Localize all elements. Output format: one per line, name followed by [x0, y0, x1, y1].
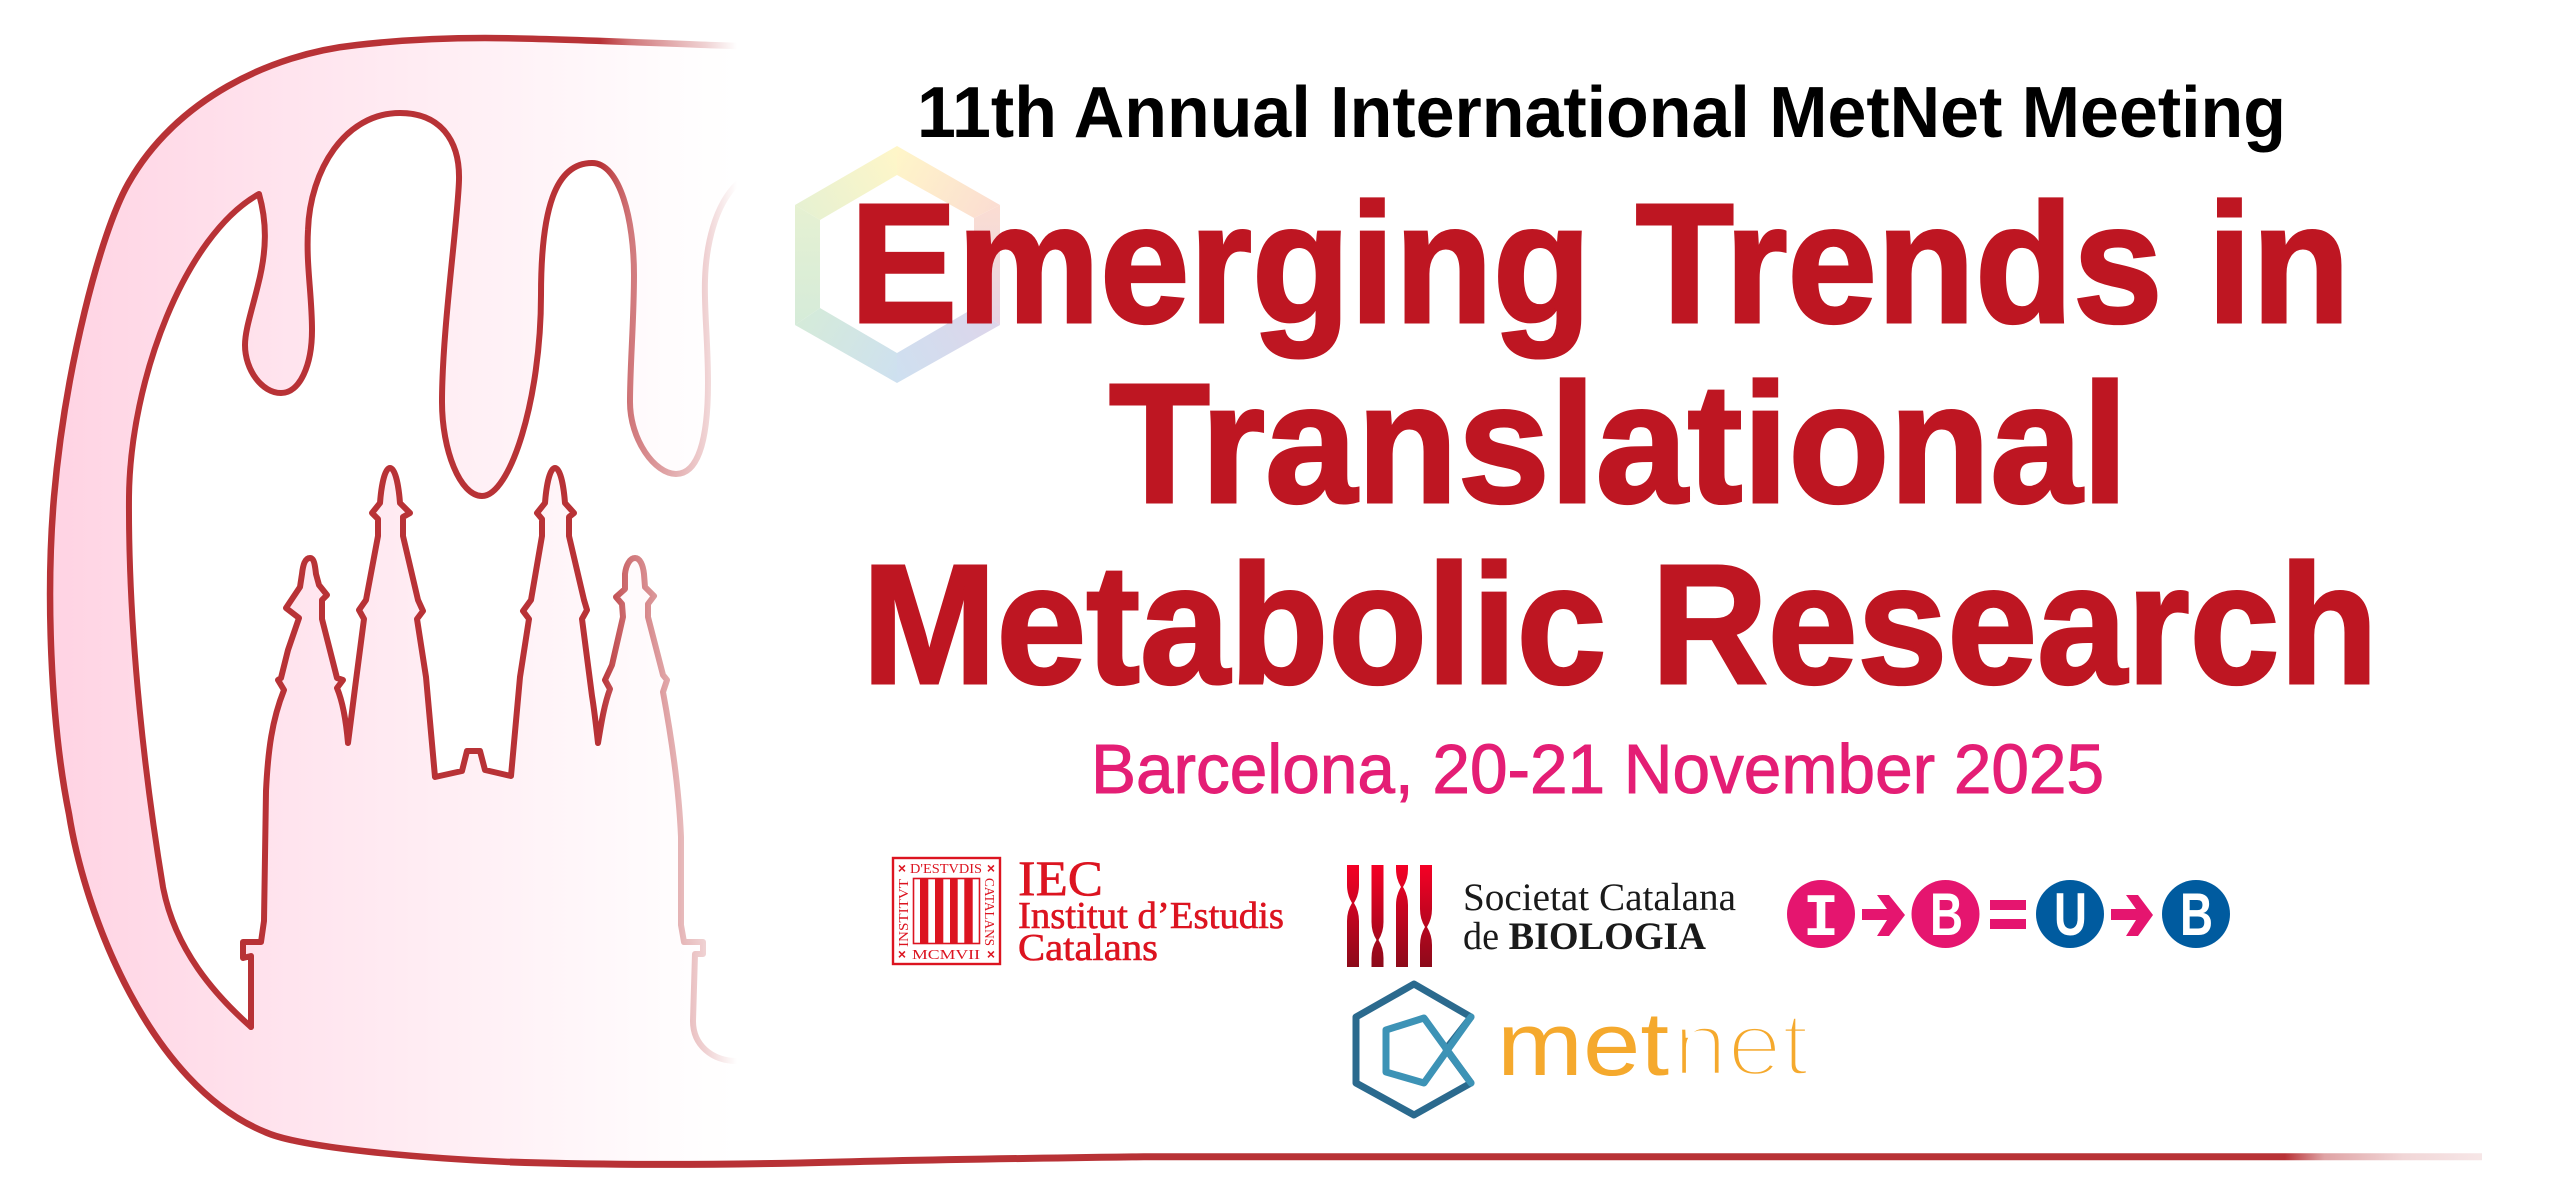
cathedral silhouette outline [243, 468, 737, 1061]
IBUB letters: B [1930, 881, 1963, 948]
main title: Metabolic Research [862, 530, 2378, 720]
IBUB letters: U [2054, 881, 2087, 948]
logo: MetNet [1356, 984, 1809, 1115]
IEC seal: MCMVII [912, 948, 980, 963]
MetNet wordmark: met [1497, 995, 1669, 1095]
IBUB letters: I [1803, 886, 1839, 954]
logo: Societat Catalana de Biologia [1347, 865, 1736, 967]
icon: pastel hexagon behind title [795, 146, 1000, 383]
MetNet wordmark [1497, 995, 1809, 1095]
IEC seal: D'ESTVDIS [910, 862, 982, 877]
IBUB discs [1787, 880, 2230, 948]
IEC wordmark: Institut d’Estudis [1018, 895, 1284, 937]
baseline rule fading to the right [510, 1157, 2482, 1164]
IBUB arrows and equals [1862, 895, 2153, 936]
main title: Translational [1109, 349, 2128, 539]
logo: IBUB [1787, 880, 2230, 954]
logo: Institut d'Estudis Catalans [893, 850, 1284, 969]
SCB striped mark [1347, 865, 1432, 967]
location and date: Barcelona, 20-21 November 2025 [1091, 730, 2104, 808]
IEC seal [893, 858, 1000, 964]
IEC wordmark: Catalans [1018, 927, 1158, 969]
MetNet wordmark: net [1673, 995, 1809, 1095]
SCB wordmark: Societat Catalana [1463, 876, 1736, 919]
IBUB letters [1803, 881, 2213, 954]
IEC seal: × [987, 860, 995, 876]
main title: Emerging Trends in [850, 169, 2350, 359]
IEC seal: × [898, 946, 906, 962]
IEC seal: × [987, 946, 995, 962]
drips and inner arch outline [129, 113, 737, 1027]
IEC seal: INSTITVT [897, 879, 912, 947]
IEC wordmark: IEC [1018, 850, 1103, 906]
arch outer outline [50, 38, 737, 1162]
IBUB letters: B [2180, 881, 2213, 948]
IEC seal: × [898, 860, 906, 876]
main title [850, 169, 2378, 720]
IEC wordmark [1018, 850, 1284, 969]
SCB wordmark: de BIOLOGIA [1463, 915, 1706, 958]
event subtitle: 11th Annual International MetNet Meeting [917, 73, 2286, 153]
MetNet hexagon mark [1356, 984, 1471, 1115]
arch fill [50, 38, 737, 1162]
SCB wordmark [1463, 876, 1736, 958]
IEC seal: CATALANS [981, 878, 996, 946]
